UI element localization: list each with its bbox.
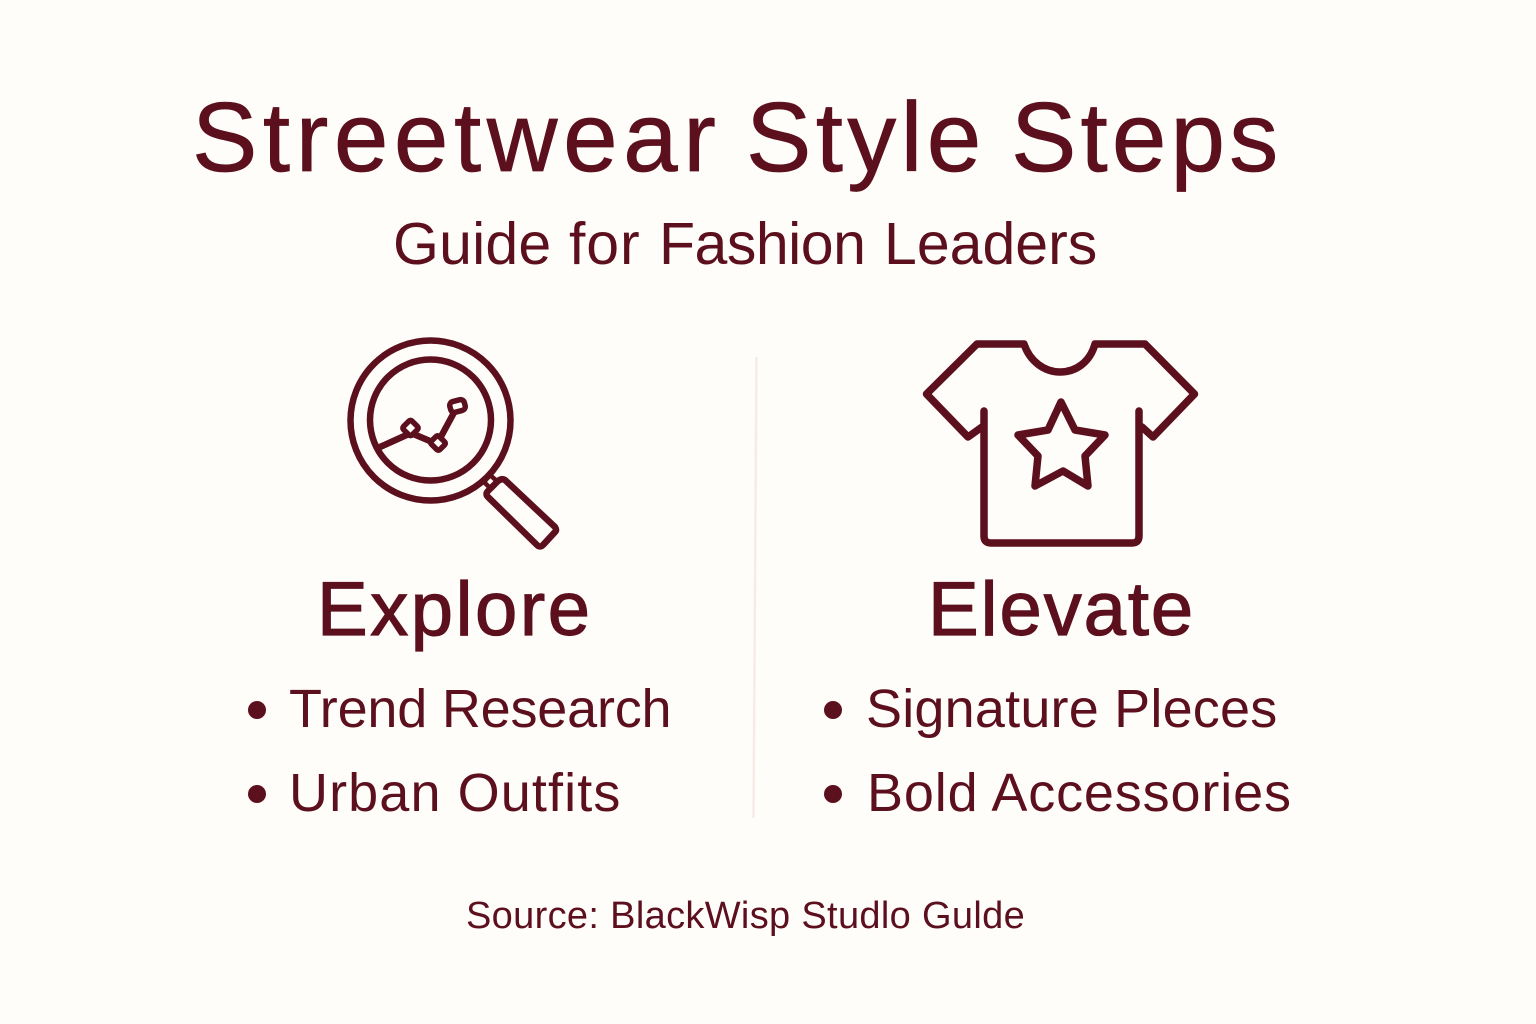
- heading: Elevate: Elevate: [928, 567, 1195, 652]
- item: Bold Accessories: Bold Accessories: [867, 763, 1292, 823]
- bullet 1: [248, 701, 266, 719]
- title: [192, 82, 1282, 192]
- item: Signature Pieces: Signature Pleces: [866, 679, 1277, 739]
- icon: t-shirt with star: [922, 340, 1198, 547]
- bullet 1: [824, 701, 842, 719]
- item: Trend Research: Trend Research: [289, 679, 671, 739]
- subtitle: Fashion: [659, 211, 865, 277]
- title: Streetwear: [192, 82, 721, 192]
- divider: [752, 357, 758, 818]
- subtitle: Leaders: [884, 211, 1097, 277]
- item: Urban Outfits: Urban Outfits: [289, 763, 621, 823]
- subtitle: [393, 211, 1097, 277]
- source note: Source: BlackWisp Studlo Gulde: [466, 895, 1025, 937]
- subtitle: Guide: [393, 211, 551, 277]
- icon: magnifying glass with trend line: [347, 337, 560, 550]
- bullet 2: [824, 785, 842, 803]
- heading: Explore: Explore: [317, 567, 593, 652]
- list: Explore items: [248, 679, 671, 823]
- subtitle: for: [569, 211, 641, 277]
- bullet 2: [248, 785, 266, 803]
- list: Elevate items: [824, 679, 1292, 823]
- title: Style: [746, 82, 986, 192]
- title: Steps: [1011, 82, 1282, 192]
